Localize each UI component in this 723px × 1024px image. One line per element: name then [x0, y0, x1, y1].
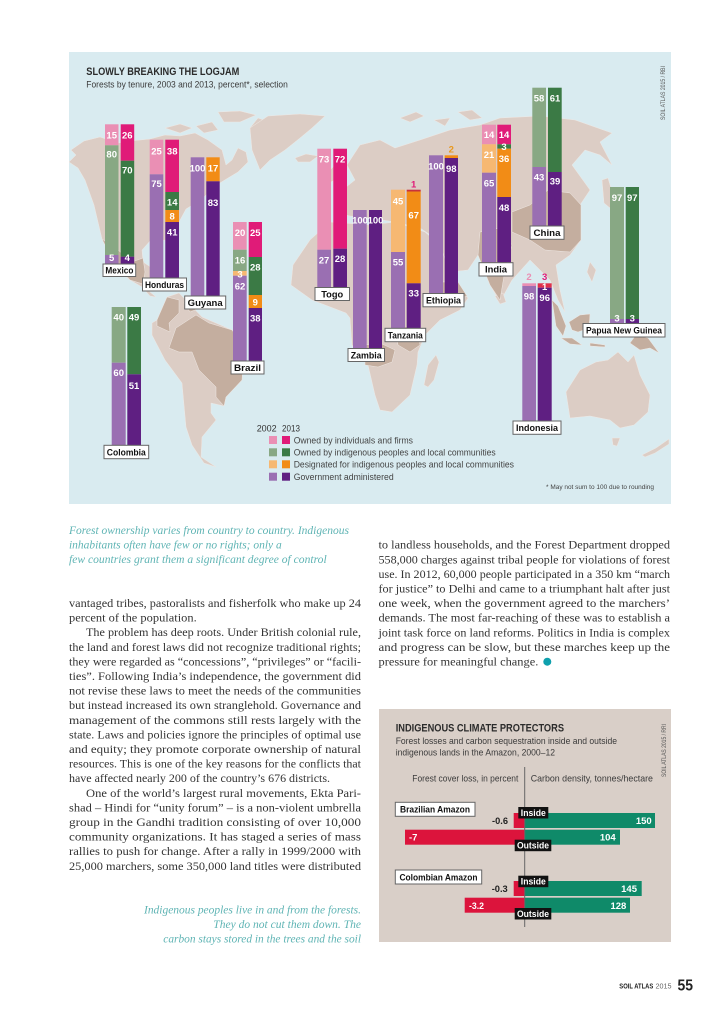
legend: 2002	[257, 423, 277, 433]
legend: Owned by indigenous peoples and local communities	[294, 448, 496, 458]
inside and outside tags: Outside	[517, 841, 549, 852]
bars: Mexico: 15	[106, 130, 118, 142]
bars: Mexico: 26	[122, 130, 133, 142]
caption: forest ownership	[68, 524, 349, 566]
bars: Ethiopia: Ethiopia	[426, 296, 462, 306]
bars: Tanzania: 55	[393, 258, 404, 268]
bars: Indonesia: 2	[526, 272, 532, 283]
bars: Togo: 73	[319, 154, 329, 166]
heading: indigenous climate protectors: Forest losses and carbon sequestration inside and outside	[396, 736, 617, 747]
bars: Indonesia: 98	[524, 292, 534, 302]
bars: India: 36	[499, 154, 509, 165]
bars: Papua New Guinea: 3	[630, 314, 635, 324]
bars: Zambia: 100	[352, 216, 368, 226]
bars: Colombia: 60	[113, 368, 124, 379]
legend: Designated for indigenous peoples and local communities	[294, 460, 514, 470]
caption: indigenous peoples	[143, 904, 361, 945]
bars: Colombia: 49	[129, 312, 139, 324]
bars: Honduras: 41	[167, 228, 178, 238]
bars: Brazil: 62	[235, 282, 245, 292]
text block: left column: management of the commons still rests largely with the	[69, 714, 361, 727]
text block: left column: community organizations. It has staged a series of mass	[69, 831, 362, 844]
bars: Togo: Togo	[321, 290, 343, 300]
bars: Togo	[315, 149, 350, 300]
bars: India	[479, 125, 513, 276]
text block: left column: ties”. Following India’s independence, the government did	[69, 670, 361, 683]
caption: forest ownership: few countries grant them a significant degree of control	[69, 553, 327, 566]
bars: China: 58	[534, 94, 544, 104]
text block: left column: the land and forest laws did not recognize traditional rights;	[69, 641, 361, 654]
panel: indigenous climate protectors	[379, 709, 671, 942]
chart: Brazilian Amazon	[395, 802, 655, 845]
caption: forest ownership: Forest ownership varies from country to country. Indigenous	[68, 524, 349, 537]
text block: right column: use. In 2012, 60,000 people participated in a 350 km “march	[378, 568, 670, 581]
bars: Indonesia: 1	[542, 282, 548, 293]
bars: Papua New Guinea: 97	[627, 193, 638, 204]
bars: Papua New Guinea: Papua New Guinea	[586, 326, 663, 337]
chart: Colombian Amazon: 128	[610, 901, 626, 912]
bars: Zambia: 100	[368, 216, 383, 226]
footnote: * May not sum to 100 due to rounding	[546, 484, 654, 491]
text block: right column	[377, 539, 671, 668]
bars: Guyana: 17	[208, 164, 218, 174]
heading: indigenous climate protectors	[396, 722, 617, 759]
bars: India: India	[485, 265, 508, 276]
bars: Tanzania: Tanzania	[388, 330, 423, 342]
heading: slowly breaking the logjam: SLOWLY BREAKING THE LOGJAM	[86, 66, 239, 78]
text block: left column: resources. This is one of the key reasons for the conflicts that	[69, 758, 362, 771]
axis headings: Carbon density, tonnes/hectare	[531, 773, 653, 784]
chart: Brazilian Amazon: -0.6	[492, 816, 508, 827]
axis headings: Forest cover loss, in percent	[412, 773, 519, 784]
bars: Honduras: 25	[151, 146, 162, 158]
heading: indigenous climate protectors: INDIGENOUS CLIMATE PROTECTORS	[396, 722, 564, 734]
caption: indigenous peoples: They do not cut them down. The	[213, 918, 361, 931]
text block: right column: and progress can be slow, but these marches keep up the	[378, 641, 670, 654]
text block: left column: shad – Hindi for “unity forum” – is a non-violent umbrella	[69, 801, 361, 814]
heading: slowly breaking the logjam: Forests by tenure, 2003 and 2013, percent*, selection	[86, 80, 288, 90]
chart: Brazilian Amazon: 104	[600, 832, 616, 844]
text block: left column: not revise these laws to meet the needs of the communities	[69, 685, 362, 698]
bars: Indonesia: Indonesia	[516, 423, 559, 434]
bars: Ethiopia: 98	[446, 164, 457, 175]
source credit: SOIL ATLAS 2015 / RBI	[661, 66, 667, 120]
legend: Government administered	[294, 472, 394, 482]
bars: Mexico: 80	[106, 150, 117, 160]
bars: Mexico: 5	[109, 253, 115, 264]
bars: India: 3	[501, 142, 507, 153]
text block: right column: pressure for meaningful change.	[378, 656, 538, 668]
bars: Ethiopia	[423, 144, 464, 307]
text block: left column: One of the world’s largest rural movements, Ekta Pari-	[86, 787, 361, 800]
chart: Colombian Amazon: -0.3	[492, 884, 508, 895]
bars: Togo: 72	[335, 154, 345, 166]
inside and outside tags: Outside	[517, 909, 549, 920]
bars: China: 39	[550, 176, 560, 188]
bars: Honduras: 75	[151, 179, 162, 190]
bars: Papua New Guinea	[583, 187, 665, 337]
bars: China: 61	[550, 94, 561, 104]
bars: Brazil: 38	[250, 314, 261, 324]
bars: India: 14	[499, 130, 510, 141]
bars: Guyana: 100	[190, 164, 205, 174]
bars: Honduras: 14	[167, 198, 178, 208]
inside and outside tags: Inside	[521, 877, 546, 888]
axis headings	[412, 773, 653, 784]
inside and outside tags: Inside	[521, 808, 546, 819]
bars: Honduras	[142, 140, 186, 291]
text block: right column: 558,000 charges against tribal people for violations of forest	[378, 553, 671, 566]
chart: Brazilian Amazon: -7	[409, 832, 417, 844]
bars: Honduras: 38	[167, 146, 177, 158]
bars: China: 43	[534, 172, 544, 184]
bars: Brazil: Brazil	[234, 363, 261, 374]
bars: Ethiopia: 2	[449, 144, 454, 156]
bars: Indonesia: 96	[539, 293, 550, 304]
text block: right column: demands. The most far-reaching of these was to establish a	[378, 612, 670, 625]
bars: India: 21	[484, 150, 495, 161]
text block: left column: and equity; they promote corporate ownership of natural	[69, 743, 361, 756]
bars: Papua New Guinea: 97	[612, 193, 622, 204]
bars: Honduras: 8	[170, 212, 175, 222]
bars: Togo: 28	[335, 254, 345, 265]
bars: Papua New Guinea: 3	[614, 314, 620, 324]
icon: end-of-article dot	[543, 658, 551, 666]
world map background	[69, 110, 669, 467]
footer: running title and page number: 55	[678, 978, 693, 994]
text block: left column	[69, 597, 362, 873]
bars: Brazil: 16	[235, 256, 245, 266]
axis line	[524, 767, 526, 927]
bars: Colombia	[104, 307, 149, 459]
legend: Owned by individuals and firms	[294, 435, 413, 445]
bars: Brazil: 3	[237, 270, 243, 280]
bars: Guyana: 83	[208, 198, 218, 209]
bars: Tanzania: 1	[411, 180, 417, 190]
chart: Colombian Amazon: 145	[621, 884, 638, 895]
text block: right column: for justice” to Delhi and came to a triumphant halt after just	[378, 582, 671, 596]
inside and outside tags	[515, 807, 551, 920]
text block: left column: group in the Gandhi tradition consisting of over 10,000	[69, 816, 361, 829]
footer: running title and page number	[619, 978, 693, 994]
bars: Brazil	[231, 222, 264, 374]
caption: forest ownership: inhabitants often have few or no rights; only a	[69, 538, 282, 552]
bars: Togo: 27	[319, 256, 329, 266]
chart: Brazilian Amazon: Brazilian Amazon	[400, 805, 470, 816]
bars: Mexico: 4	[125, 253, 131, 264]
bars: India: 48	[499, 203, 509, 214]
chart: Colombian Amazon: -3.2	[469, 901, 484, 912]
bars: Mexico	[103, 124, 136, 277]
bars: Zambia: Zambia	[351, 350, 382, 362]
bars: Colombia: Colombia	[107, 448, 146, 458]
bars: Colombia: 40	[113, 312, 124, 324]
bars: Brazil: 9	[253, 298, 258, 308]
text block: left column: but instead increased its own stranglehold. Governance and	[69, 699, 361, 712]
heading: slowly breaking the logjam	[86, 66, 288, 90]
text block: left column: The problem has deep roots. Under British colonial rule,	[86, 626, 361, 639]
bars: Guyana: Guyana	[188, 298, 223, 309]
panel: forest tenure world map	[69, 52, 671, 504]
bars: Tanzania: 67	[408, 210, 419, 222]
bars: Brazil: 25	[250, 228, 261, 239]
bars: Honduras: Honduras	[145, 280, 184, 291]
heading: indigenous climate protectors: indigenous lands in the Amazon, 2000–12	[396, 748, 555, 759]
caption: indigenous peoples: carbon stays stored in the trees and the soil	[163, 932, 361, 945]
bars: Indonesia	[513, 272, 561, 434]
text block: left column: percent of the population.	[69, 612, 197, 625]
bars: India: 65	[484, 178, 495, 190]
text block: left column: have affected nearly 200 of the country’s 676 districts.	[69, 772, 330, 785]
chart: Colombian Amazon: Colombian Amazon	[400, 872, 478, 884]
bars: Mexico: 70	[122, 166, 133, 176]
bars: Indonesia: 3	[542, 272, 547, 283]
bars: China	[530, 88, 564, 239]
chart: Brazilian Amazon: 150	[636, 816, 652, 827]
bars: China: China	[534, 228, 561, 239]
text block: right column: to landless households, and the Forest Department dropped	[378, 539, 670, 552]
legend	[257, 423, 514, 482]
bars: Guyana	[185, 157, 226, 309]
text block: left column: they were regarded as “concessions”, “privileges” or “facili-	[69, 655, 361, 668]
bars: Tanzania: 45	[393, 196, 404, 208]
text block: left column: vantaged tribes, pastoralists and fisherfolk who make up 24	[69, 597, 361, 610]
bars: India: 14	[484, 130, 495, 141]
bars: Ethiopia: 100	[428, 162, 444, 172]
text block: left column: rallies to push for change. After a rally in 1999/2000 with	[69, 845, 361, 858]
text block: right column: one week, when the government agreed to the marchers’	[378, 597, 670, 610]
caption: indigenous peoples: Indigenous peoples live in and from the forests.	[143, 904, 361, 917]
text block: left column: state. Laws and policies ignore the principles of optimal use	[69, 728, 361, 741]
text block: right column: joint task force on land reforms. Politics in India is complex	[377, 626, 670, 639]
bars: Tanzania: 33	[408, 288, 419, 300]
bars: Zambia	[348, 210, 384, 362]
source credit: SOIL ATLAS 2015 / RRI	[662, 724, 668, 777]
footer: running title and page number: 2015	[656, 984, 672, 990]
legend: 2013	[282, 423, 300, 433]
bars: Tanzania	[385, 180, 426, 342]
bars: Brazil: 28	[250, 262, 261, 274]
text block: left column: 25,000 marchers, some 350,000 land titles were distributed	[69, 860, 361, 873]
bars: Brazil: 20	[235, 228, 245, 239]
chart: Colombian Amazon	[395, 870, 642, 913]
footer: running title and page number: SOIL ATLAS	[619, 984, 654, 990]
bars: Colombia: 51	[129, 381, 140, 392]
bars: Mexico: Mexico	[105, 266, 134, 277]
